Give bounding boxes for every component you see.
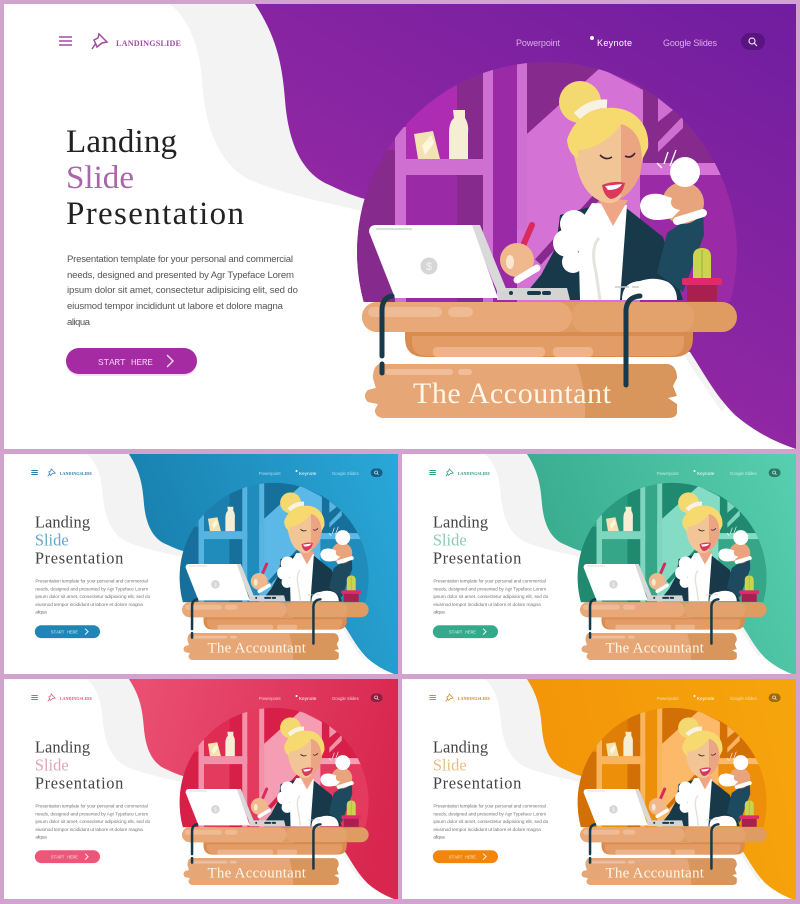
heading: Presentation [433, 549, 521, 568]
body text: ipsum dolor sit amet, consectetur adipisicing elit, sed do [433, 819, 549, 825]
nav: Google Slides: Google Slides [730, 471, 757, 476]
body text: needs, designed and presented by Agr Typeface Lorem [433, 811, 546, 817]
logo pin icon [48, 469, 55, 476]
nav: Powerpoint: Powerpoint [657, 696, 679, 701]
resting hand [622, 279, 677, 300]
body text: eiusmod tempor incididunt ut labore et dolore magna [433, 602, 541, 608]
nav: Powerpoint: Powerpoint [259, 696, 281, 701]
search button [769, 693, 781, 702]
illustration title: The Accountant [605, 866, 705, 882]
body text: ipsum dolor sit amet, consectetur adipisicing elit, sed do [433, 594, 549, 600]
nav: Keynote: Keynote [697, 696, 715, 701]
heading: Landing [66, 124, 177, 160]
illustration: accountant at desk [357, 60, 740, 442]
body text: Presentation template for your personal and commercial [35, 578, 148, 584]
nav: Powerpoint: Powerpoint [516, 38, 560, 48]
illustration title: The Accountant [207, 866, 307, 882]
heading: Landing [433, 513, 488, 532]
nav: Powerpoint: Powerpoint [259, 471, 281, 476]
heading: Slide [433, 531, 467, 550]
woman [500, 81, 704, 300]
panel: purple main slide [4, 4, 796, 449]
logo pin icon [92, 34, 107, 49]
body text: eiusmod tempor incididunt ut labore et dolore magna [67, 301, 284, 312]
search button [741, 33, 765, 50]
heading: Slide [66, 160, 134, 196]
body text [35, 803, 151, 841]
body text: ipsum dolor sit amet, consectetur adipisicing elit, sed do [67, 285, 298, 296]
body text: ipsum dolor sit amet, consectetur adipisicing elit, sed do [35, 594, 151, 600]
heading: Slide [35, 531, 69, 550]
mouth [602, 182, 625, 199]
panel: green slide [402, 454, 796, 674]
heading: Presentation [35, 774, 123, 793]
menu icon [31, 695, 38, 699]
body text [67, 254, 298, 328]
laptop [369, 225, 570, 300]
start button [433, 850, 498, 863]
nav: Keynote: Keynote [299, 471, 317, 476]
body text: ipsum dolor sit amet, consectetur adipisicing elit, sed do [35, 819, 151, 825]
white shirt with ruffles [553, 203, 627, 300]
hair [567, 108, 648, 160]
logo text: LANDINGSLIDE [116, 39, 182, 48]
start button [433, 625, 498, 638]
heading: Landing [433, 738, 488, 757]
menu icon [429, 695, 436, 699]
nav: Keynote: Keynote [697, 471, 715, 476]
heading: Landing [35, 738, 90, 757]
body text: Presentation template for your personal and commercial [67, 254, 293, 265]
heading: Presentation [35, 549, 123, 568]
heading [433, 738, 521, 793]
start button [66, 348, 197, 376]
body text: eiusmod tempor incididunt ut labore et dolore magna [35, 602, 143, 608]
nav: Keynote [694, 695, 715, 701]
start button: START HERE [51, 855, 78, 861]
desk straps [382, 296, 640, 385]
illustration: accountant (blue) [180, 482, 370, 672]
search button [769, 468, 781, 477]
body text: aliqua [67, 317, 91, 328]
heading [35, 513, 123, 568]
heading: Presentation [433, 774, 521, 793]
laptop: $ [426, 261, 432, 273]
logo text: LANDINGSLIDE [458, 696, 490, 701]
desk drawer [405, 332, 693, 357]
start button: START HERE [98, 357, 153, 368]
search button [371, 693, 383, 702]
illustration title: The Accountant [605, 641, 705, 657]
window room with shelves [357, 60, 740, 442]
body text [35, 578, 151, 616]
desk top [362, 302, 737, 332]
nav: Google Slides: Google Slides [663, 38, 718, 48]
illustration: accountant (orange) [578, 707, 768, 897]
nav: Keynote [590, 36, 632, 48]
panel: blue slide [4, 454, 398, 674]
logo pin icon [446, 694, 453, 701]
face [570, 122, 622, 203]
desk base planks [365, 364, 677, 418]
body text [433, 803, 549, 841]
body text: Presentation template for your personal and commercial [433, 803, 546, 809]
nav: Keynote: Keynote [299, 696, 317, 701]
nav: Powerpoint: Powerpoint [657, 471, 679, 476]
panel: red slide [4, 679, 398, 899]
nav: Keynote: Keynote [597, 38, 632, 48]
nav: Keynote [694, 470, 715, 476]
nav: Keynote [296, 695, 317, 701]
body text: Presentation template for your personal and commercial [35, 803, 148, 809]
start button [35, 850, 100, 863]
illustration title: The Accountant [207, 641, 307, 657]
panel: orange slide [402, 679, 796, 899]
nav: Google Slides: Google Slides [332, 471, 359, 476]
body text: aliqua [433, 610, 445, 616]
illustration title: The Accountant [413, 377, 612, 410]
shelf objects: frame and bottle [414, 110, 468, 159]
heading: Slide [433, 756, 467, 775]
logo pin icon [48, 694, 55, 701]
heading: Slide [35, 756, 69, 775]
raised fist with puff and cuff [640, 150, 704, 224]
body text: needs, designed and presented by Agr Typeface Lorem [35, 586, 148, 592]
heading: Presentation [66, 196, 244, 232]
logo text: LANDINGSLIDE [60, 471, 92, 476]
body text: needs, designed and presented by Agr Typeface Lorem [433, 586, 546, 592]
nav: Google Slides: Google Slides [730, 696, 757, 701]
menu icon [429, 470, 436, 474]
writing hand with pen [500, 225, 537, 280]
body text: aliqua [433, 835, 445, 841]
menu icon [59, 37, 72, 45]
body text: needs, designed and presented by Agr Typeface Lorem [35, 811, 148, 817]
start button: START HERE [449, 855, 476, 861]
hair bun [559, 81, 601, 123]
body text: Presentation template for your personal and commercial [433, 578, 546, 584]
start button: START HERE [449, 630, 476, 636]
body text: aliqua [35, 835, 47, 841]
body text: needs, designed and presented by Agr Typeface Lorem [67, 270, 294, 281]
illustration: accountant (red) [180, 707, 370, 897]
body text [433, 578, 549, 616]
nav: Google Slides: Google Slides [332, 696, 359, 701]
search button [371, 468, 383, 477]
body text: eiusmod tempor incididunt ut labore et dolore magna [433, 827, 541, 833]
menu icon [31, 470, 38, 474]
neck [598, 198, 628, 226]
logo text: LANDINGSLIDE [60, 696, 92, 701]
cactus in pot [682, 248, 722, 301]
heading [66, 124, 244, 232]
start button [35, 625, 100, 638]
nav: Keynote [296, 470, 317, 476]
heading: Landing [35, 513, 90, 532]
body text: aliqua [35, 610, 47, 616]
jacket [527, 205, 683, 300]
illustration: accountant (green) [578, 482, 768, 672]
closed eyes [600, 153, 635, 159]
logo text: LANDINGSLIDE [458, 471, 490, 476]
heading [433, 513, 521, 568]
start button: START HERE [51, 630, 78, 636]
heading [35, 738, 123, 793]
logo pin icon [446, 469, 453, 476]
body text: eiusmod tempor incididunt ut labore et dolore magna [35, 827, 143, 833]
